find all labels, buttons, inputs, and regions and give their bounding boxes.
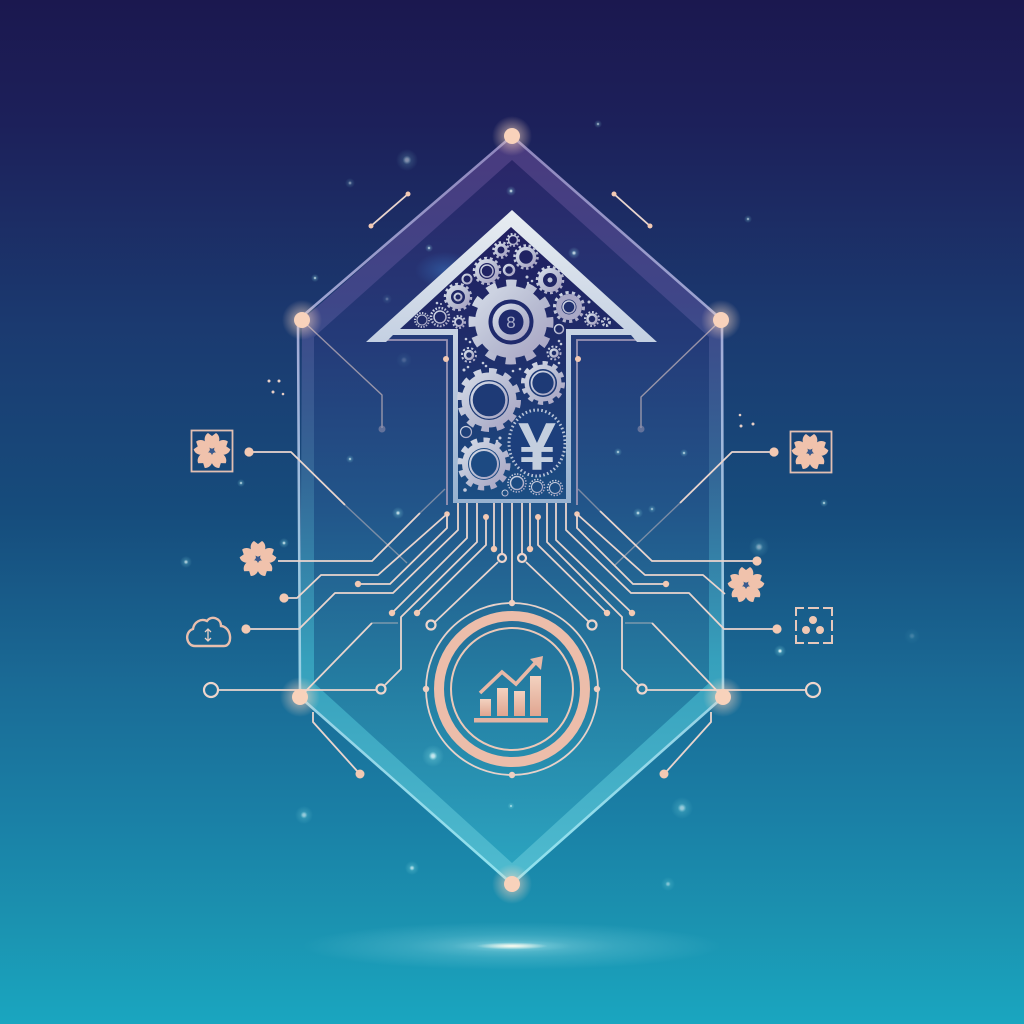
main gear: 8 [506, 313, 516, 332]
arrow with gears [366, 210, 657, 503]
hexagon corner nodes [280, 116, 743, 904]
short accent lines at top [368, 192, 652, 228]
gear lower [460, 440, 508, 488]
icon: bar chart with arrow [474, 656, 548, 722]
gear right [524, 364, 562, 402]
central growth badge [423, 600, 600, 778]
arrow interior [400, 227, 624, 499]
icon: sakura in box right [790, 432, 832, 472]
icon: sakura left [239, 541, 277, 578]
right circuit traces [518, 447, 820, 778]
yen gear [509, 409, 565, 485]
arrow side rails [386, 340, 637, 505]
left circuit traces [204, 447, 506, 778]
icon: dashed target with dots [796, 608, 832, 643]
corner to arrow connectors [302, 320, 721, 432]
badge nodes [423, 600, 600, 778]
arrow frame [366, 210, 657, 503]
main gear [469, 280, 553, 364]
hexagon shield panel [298, 136, 723, 884]
blue halo behind arrow [415, 252, 475, 288]
center trace [511, 503, 513, 603]
scattered specks [268, 380, 754, 428]
yen gear: ¥ [518, 409, 556, 485]
badge rings [426, 603, 598, 775]
floor light glow [302, 922, 722, 970]
gear left [460, 372, 518, 428]
icon: sakura in box left [192, 430, 232, 472]
icon: cloud [187, 618, 230, 646]
small gears [415, 234, 610, 496]
icon: sakura right [727, 567, 765, 604]
sparkles [180, 120, 920, 891]
